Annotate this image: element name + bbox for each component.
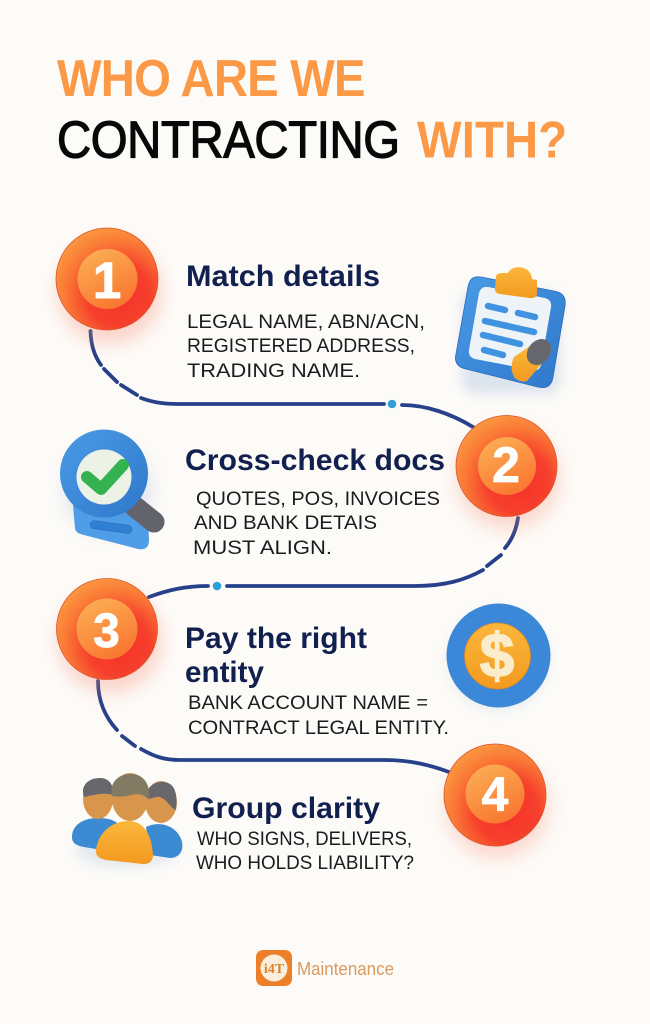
step 1 badge: 1: [93, 252, 121, 309]
step 2 text: MUST ALIGN.: [193, 538, 332, 559]
connector: step 1 to step 2: [90, 331, 473, 427]
logo: i4T Maintenance: Maintenance: [297, 959, 394, 979]
step 4 badge: 4: [482, 769, 509, 822]
step 1 text: REGISTERED ADDRESS,: [187, 336, 415, 357]
connector: step 3 to step 4: [98, 681, 449, 772]
step 1 heading: Match details: [186, 260, 380, 293]
step 3 badge: 3: [93, 605, 120, 658]
step 2 badge: [456, 416, 560, 530]
step 3 badge: [56, 578, 162, 693]
step 4 text: WHO HOLDS LIABILITY?: [196, 853, 414, 874]
step 3 text: BANK ACCOUNT NAME =: [188, 693, 428, 714]
step 4 text: [196, 829, 414, 874]
step 1 badge: [56, 228, 162, 344]
step 2 heading: Cross-check docs: [185, 444, 445, 477]
left person: [72, 778, 120, 851]
step 4 text: WHO SIGNS, DELIVERS,: [197, 829, 412, 850]
step 4 heading: Group clarity: [192, 792, 380, 825]
step 3 text: [188, 693, 449, 739]
step 1 text: TRADING NAME.: [187, 361, 360, 382]
icon: clipboard: [455, 267, 565, 394]
step 2 text: AND BANK DETAIS: [194, 513, 377, 534]
title: WHO ARE WE: [57, 49, 365, 108]
icon: dollar coin: [446, 604, 550, 710]
centre person: [96, 773, 153, 864]
step 3 heading: Pay the right: [185, 622, 367, 655]
step 2 text: [193, 489, 440, 559]
step 2 text: QUOTES, POS, INVOICES: [196, 489, 440, 510]
logo: i4T Maintenance: [256, 950, 394, 986]
step 3 text: CONTRACT LEGAL ENTITY.: [188, 718, 449, 739]
title: WITH?: [417, 110, 567, 169]
step 4 badge: [444, 744, 549, 859]
icon: dollar coin: $: [480, 622, 514, 691]
step 3 heading: entity: [185, 656, 264, 689]
title: CONTRACTING: [57, 110, 400, 169]
step 3 heading: [185, 622, 367, 689]
title: [57, 49, 567, 169]
step 1 text: [187, 312, 425, 382]
icon: group of people: [72, 773, 182, 868]
step 1 text: LEGAL NAME, ABN/ACN,: [187, 312, 425, 333]
right person: [145, 781, 182, 858]
logo: i4T Maintenance: i4T: [264, 962, 285, 977]
connector: step 2 to step 3: [149, 518, 518, 597]
icon: magnifier with check: [60, 430, 154, 549]
step 2 badge: 2: [492, 437, 520, 493]
